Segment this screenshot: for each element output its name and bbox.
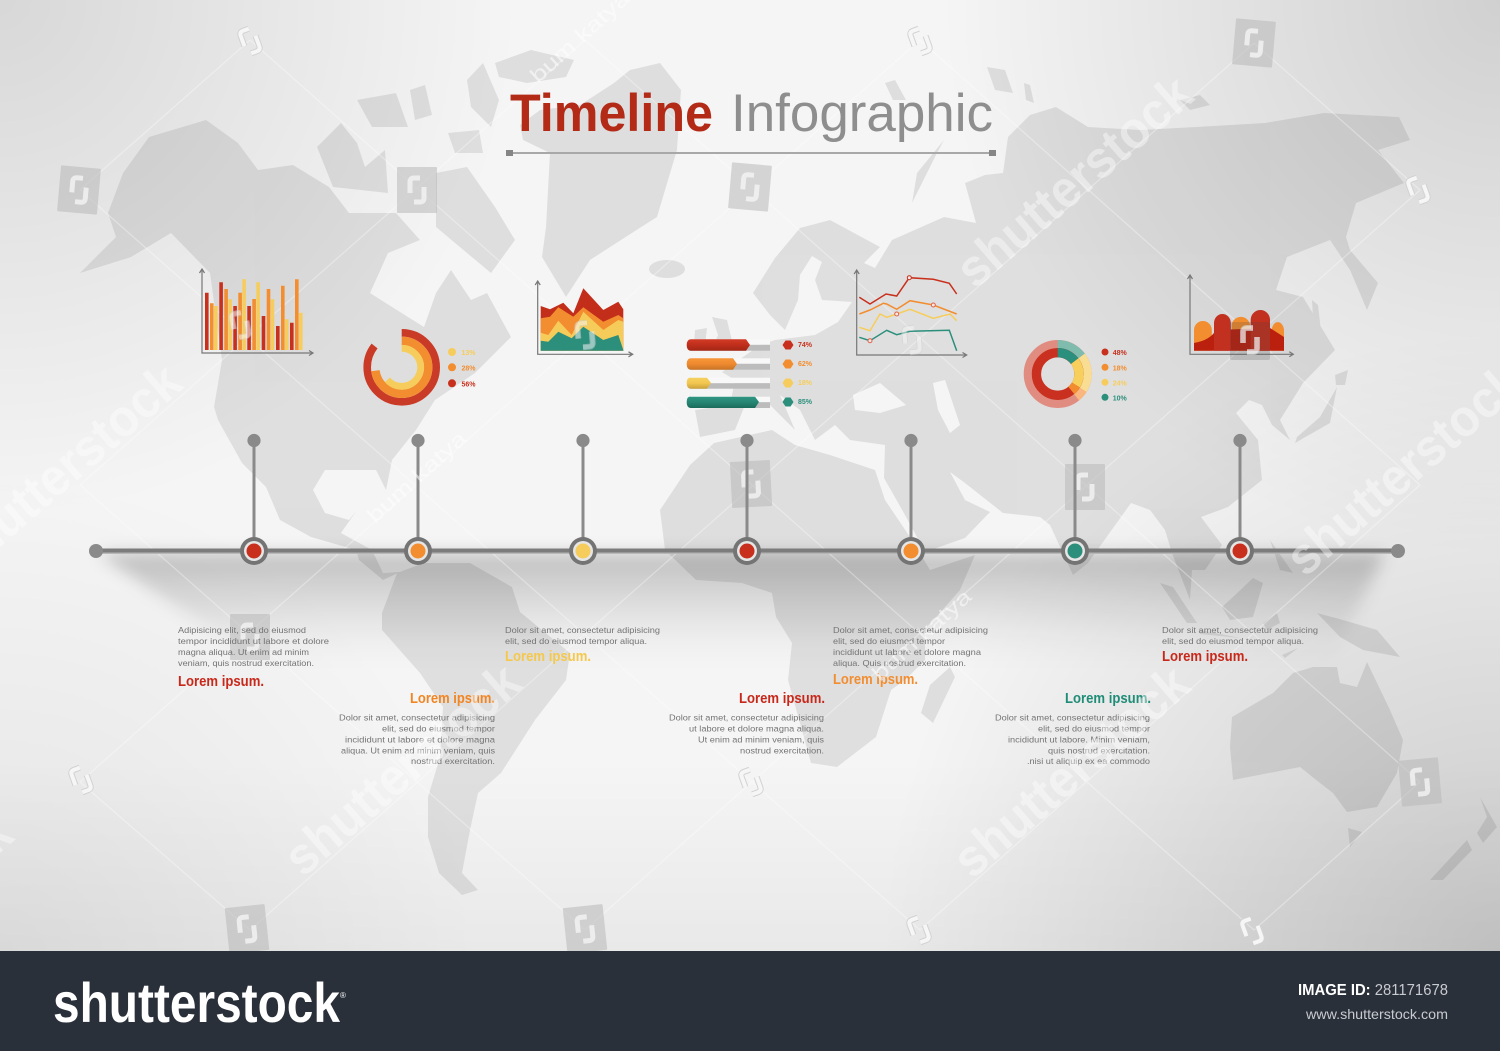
chart watermark marks	[231, 312, 1270, 360]
stacked area axes	[535, 281, 633, 357]
radial legend: 56%	[462, 381, 476, 388]
footer registered mark: ®	[340, 991, 346, 1000]
radial legend: 13%	[462, 350, 476, 357]
bar chart axes	[200, 269, 313, 356]
text block 6: quis nostrud exercitation.	[1048, 746, 1150, 756]
map: south america	[382, 563, 570, 895]
text block 5: incididunt ut labore et dolore magna	[833, 647, 981, 657]
text block 2: Lorem ipsum.	[410, 691, 495, 707]
text block 6: Lorem ipsum.	[1065, 691, 1151, 707]
chart 5: line chart	[854, 270, 967, 358]
timeline shadow	[98, 553, 1385, 665]
watermark lattice	[80, 40, 1420, 930]
text block 5: Lorem ipsum.	[833, 672, 918, 688]
title underline	[506, 150, 996, 156]
map: africa	[660, 430, 975, 767]
footer image id: IMAGE ID: 281171678	[1298, 982, 1448, 999]
radial arcs	[367, 333, 436, 402]
text block 2: Dolor sit amet, consectetur adipisicing	[339, 712, 495, 722]
text block 7: elit, sed do eiusmod tempor aliqua.	[1162, 636, 1304, 646]
title: infographic: Infographic	[731, 84, 993, 143]
watermark text: bum katya	[868, 585, 977, 686]
text block 6: Dolor sit amet, consectetur adipisicing	[995, 712, 1150, 722]
donut legend: 10%	[1113, 395, 1127, 402]
bar row: red: 74%	[798, 342, 813, 349]
text block 5: aliqua. Quis nostrud exercitation.	[833, 658, 966, 668]
chart 3: stacked area	[535, 281, 633, 357]
bar row: orange: 62%	[798, 361, 813, 368]
text block 7: Lorem ipsum.	[1162, 649, 1248, 665]
donut outer ring	[1028, 344, 1088, 404]
text block 1	[178, 625, 329, 690]
bump shapes	[1194, 310, 1284, 351]
line chart axes	[854, 270, 967, 358]
watermark text: bum katya	[526, 0, 635, 88]
text block 4: Dolor sit amet, consectetur adipisicing	[669, 712, 824, 722]
text block 4: Lorem ipsum.	[739, 691, 825, 707]
radial legend	[448, 348, 476, 388]
map: iceland	[649, 260, 685, 278]
footer url: www.shutterstock.com	[1305, 1006, 1448, 1022]
bar row: teal: 85%	[798, 399, 813, 406]
footer logo: shutterstock	[53, 971, 341, 1034]
text block 4: nostrud exercitation.	[740, 746, 824, 756]
title: timeline: Timeline	[510, 84, 713, 143]
map: new zealand	[1430, 797, 1497, 880]
text block 1: tempor incididunt ut labore et dolore	[178, 636, 329, 646]
text block 3: Lorem ipsum.	[505, 649, 591, 665]
donut inner ring	[1036, 353, 1079, 395]
donut legend: 18%	[1113, 365, 1127, 372]
title	[506, 84, 996, 156]
map: arctic islands	[317, 50, 574, 273]
text block 1: veniam, quis nostrud exercitation.	[178, 658, 314, 668]
timeline axis	[89, 544, 1405, 558]
bars	[205, 279, 303, 350]
map: southeast asia islands	[1160, 540, 1400, 658]
watermark text: shutterstock	[945, 64, 1204, 299]
watermark text: bum katya	[363, 427, 472, 528]
text block 2	[339, 691, 495, 766]
donut legend: 48%	[1113, 350, 1127, 357]
map: greenland	[520, 63, 681, 297]
donut legend: 24%	[1113, 380, 1127, 387]
text block 6: elit, sed do eiusmod tempor	[1038, 724, 1150, 734]
area layers	[541, 288, 623, 351]
text block 2: elit, sed do eiusmod tempor	[382, 724, 495, 734]
watermark text: shutterstock	[942, 654, 1201, 889]
text block 3: Dolor sit amet, consectetur adipisicing	[505, 625, 660, 635]
chart 1: bar chart	[200, 269, 313, 356]
text block 1: Lorem ipsum.	[178, 674, 264, 690]
map: madagascar	[921, 667, 955, 723]
world map	[80, 50, 1497, 895]
text block 7	[1162, 625, 1318, 665]
map: japan and sakhalin	[1295, 300, 1348, 443]
bar row: yellow: 18%	[798, 380, 813, 387]
chart 2: radial bars	[367, 333, 476, 402]
donut legend	[1102, 348, 1127, 402]
map: eurasia	[695, 107, 1410, 600]
watermark outline marks	[70, 27, 1429, 945]
text block 4: Ut enim ad minim veniam, quis	[698, 734, 824, 744]
text block 2: aliqua. Ut enim ad minim veniam, quis	[341, 746, 495, 756]
text block 3	[505, 625, 660, 665]
text block 5: Dolor sit amet, consectetur adipisicing	[833, 625, 988, 635]
text block 6: incididunt ut labore. Minim veniam,	[1008, 734, 1150, 744]
bump chart axes	[1188, 275, 1293, 357]
text block 4	[669, 691, 825, 756]
text block 3: elit, sed do eiusmod tempor aliqua.	[505, 636, 647, 646]
timeline nodes	[240, 537, 1254, 565]
text block 4: ut labore et dolore magna aliqua.	[689, 724, 824, 734]
map: tasmania	[1348, 828, 1362, 847]
text block 2: incididunt ut labore et dolore magna	[345, 734, 495, 744]
map: north america	[80, 120, 511, 580]
chart 6: donut	[1028, 344, 1127, 404]
timeline pins	[247, 434, 1247, 540]
text block 1: Adipisicing elit, sed do eiusmod	[178, 625, 306, 635]
chart 4: 3d horizontal bars	[687, 339, 813, 408]
lines	[859, 278, 957, 351]
line markers	[868, 276, 935, 343]
map: british isles	[694, 317, 733, 350]
text block 1: magna aliqua. Ut enim ad minim	[178, 647, 309, 657]
map: russian arctic islands	[885, 67, 1210, 203]
text block 6	[995, 691, 1151, 766]
text block 6: .nisi ut aliquip ex ea commodo	[1027, 756, 1150, 766]
footer bar	[0, 951, 1500, 1051]
text block 7: Dolor sit amet, consectetur adipisicing	[1162, 625, 1318, 635]
map: australia	[1230, 662, 1403, 812]
chart 7: bump area chart	[1188, 275, 1293, 357]
timeline	[89, 434, 1405, 565]
radial legend: 28%	[462, 365, 476, 372]
text block 2: nostrud exercitation.	[411, 756, 495, 766]
watermark text: shutterstock	[273, 652, 532, 887]
text block 5: elit, sed do eiusmod tempor	[833, 636, 945, 646]
text block 5	[833, 625, 988, 688]
